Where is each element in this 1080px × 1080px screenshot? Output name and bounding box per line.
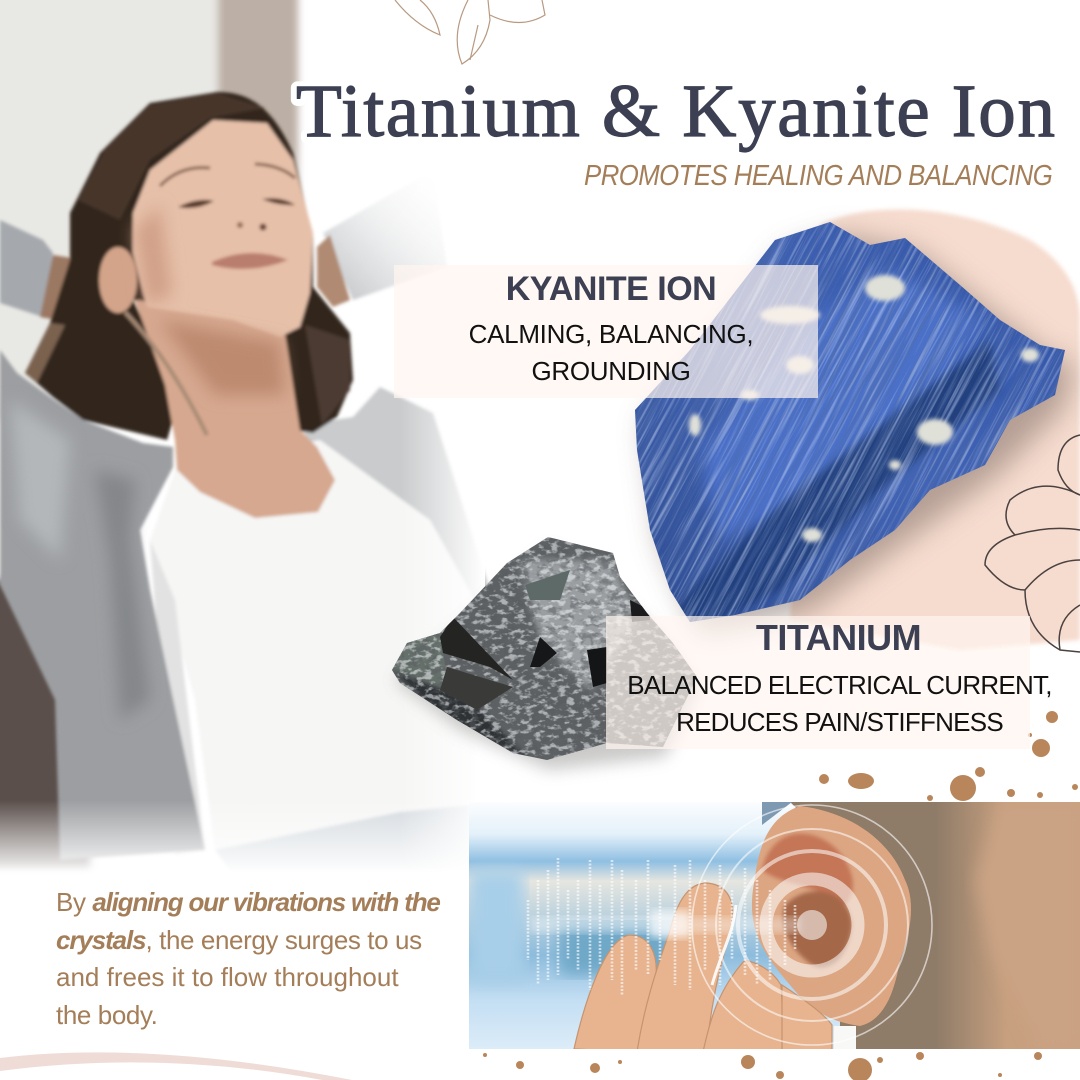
decoration: line-art flower top <box>395 0 545 64</box>
title halo: Ti <box>296 71 363 154</box>
right cardigan <box>300 387 490 620</box>
right sleeve <box>323 170 447 300</box>
text block: crystal vibrations: By aligning our vibrations with the <box>56 887 440 917</box>
crystal: titanium <box>385 530 705 770</box>
shirt <box>150 440 475 850</box>
wave form <box>528 858 795 995</box>
decoration: gold splatter right <box>819 711 1078 801</box>
neck and chest <box>135 300 335 518</box>
text: kyanite benefits <box>469 319 753 386</box>
decoration: line-art flower right <box>985 435 1080 652</box>
crystal: kyanite <box>630 221 1080 636</box>
title: Titanium & Kyanite Ion <box>296 70 1057 153</box>
sound rings <box>692 805 932 1045</box>
heading: titanium: TITANIUM <box>756 617 921 658</box>
text: titanium benefits: BALANCED ELECTRICAL CURRENT, <box>627 670 1052 700</box>
hair <box>25 92 353 440</box>
text: titanium benefits: REDUCES PAIN/STIFFNESS <box>676 707 1003 737</box>
decoration: pink stroke bottom left <box>0 1052 352 1080</box>
face and beard <box>790 802 1080 1049</box>
photo: woman relaxing <box>0 0 490 905</box>
face <box>133 120 313 337</box>
cardigan left <box>0 350 205 860</box>
panel: kyanite ion <box>394 265 818 398</box>
text block: crystal vibrations: crystals, the energy surges to us <box>56 924 422 954</box>
text block: crystal vibrations: and frees it to flow throughout <box>56 962 399 992</box>
fingers <box>574 883 832 1052</box>
photo: ear and sound waves <box>469 802 1080 1052</box>
text: titanium benefits <box>627 670 1052 737</box>
decoration: pink watercolor blob <box>790 209 1080 650</box>
text block: crystal vibrations <box>56 887 440 1030</box>
subtitle: PROMOTES HEALING AND BALANCING <box>584 160 1052 192</box>
decoration: gold splatter bottom <box>483 1052 1042 1080</box>
text: kyanite benefits: CALMING, BALANCING, <box>469 319 753 349</box>
ear <box>752 806 911 1026</box>
heading: kyanite ion: KYANITE ION <box>506 270 716 308</box>
text block: crystal vibrations: the body. <box>56 1000 157 1030</box>
panel: titanium <box>606 616 1030 749</box>
left sleeve <box>0 220 53 317</box>
text: kyanite benefits: GROUNDING <box>531 356 691 386</box>
